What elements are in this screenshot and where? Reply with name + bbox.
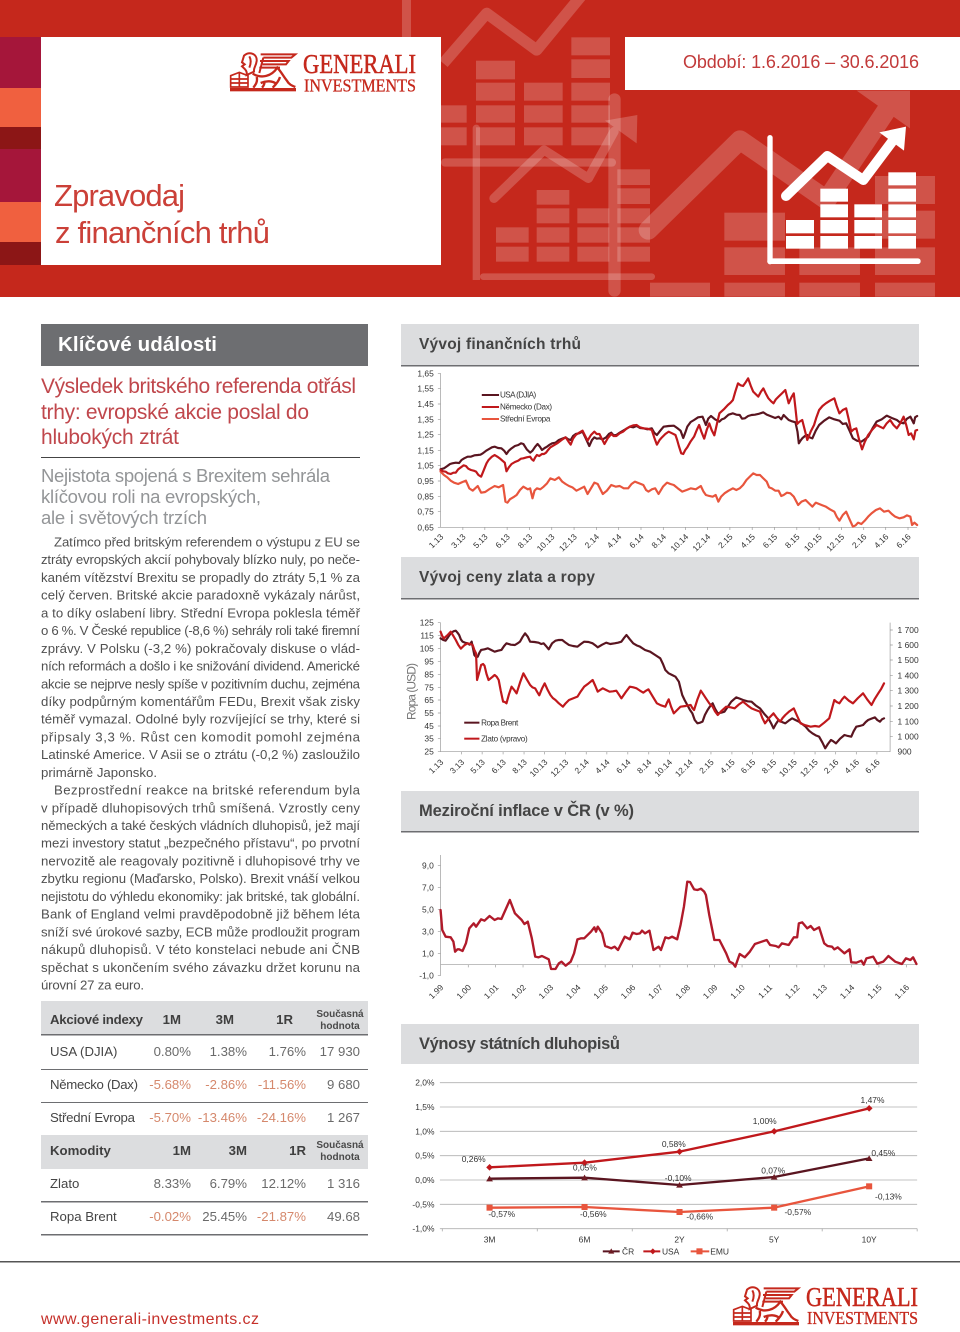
table: equity indices and commodities: 8.33%	[154, 1176, 191, 1191]
line chart: gold and oil: 45	[424, 721, 434, 731]
body text: ních reformách a došlo i ke snižování dividend. Americké	[41, 658, 360, 674]
line chart: financial markets: 1,05	[417, 461, 434, 471]
line chart: gold and oil: 10.13	[527, 757, 550, 779]
line chart: inflation: 1,0	[422, 949, 434, 959]
line chart: inflation: 1.06	[619, 982, 638, 1001]
line chart: gold and oil: 8.13	[510, 757, 529, 776]
heading: gold and oil: Vývoj ceny zlata a ropy	[419, 569, 595, 586]
header banner	[0, 0, 960, 297]
period box	[625, 37, 960, 90]
line chart: gold and oil: 1 100	[898, 716, 919, 726]
body text: ztráty evropských akcií pohybovaly blízko nuly, po neče-	[41, 552, 360, 567]
table: equity indices and commodities: 0.80%	[154, 1044, 191, 1059]
legend: gold and oil	[464, 718, 528, 743]
body text: Bezprostřední reakce na britské referendum byla	[54, 783, 361, 798]
body text: sníží své úrokové sazby, ECB může prodloužit program	[41, 924, 360, 939]
table header: commodities: Současná	[316, 1140, 364, 1151]
line chart: financial markets: 8.13	[516, 531, 534, 550]
line chart: government bond yields: 1,0%	[415, 1126, 435, 1136]
line chart: gold and oil: 105	[420, 643, 434, 653]
data labels: 0,05%	[573, 1163, 597, 1173]
body text: mezi investory statut „bezpečného přístavu“, po prvotní	[41, 836, 360, 851]
line chart: inflation: 1.05	[591, 982, 610, 1001]
line chart: inflation: 1.07	[646, 982, 665, 1001]
line chart: gold and oil: 10.14	[652, 757, 674, 779]
table: equity indices and commodities: 1 267	[327, 1110, 360, 1125]
table: equity indices and commodities: 9 680	[327, 1077, 360, 1092]
line chart: government bond yields: -1,0%	[412, 1224, 435, 1234]
table: equity indices and commodities: Německo (Dax)	[50, 1077, 138, 1092]
data labels: -0,66%	[686, 1212, 714, 1222]
line chart: financial markets: 1,35	[417, 414, 434, 424]
series: ČR	[486, 1155, 873, 1188]
heading: financial markets: Vývoj finančních trhů	[419, 336, 581, 353]
body text: nejistotu do výhledu ekonomiky: jak britské, tak globální.	[41, 889, 360, 904]
data labels: 0,26%	[462, 1154, 486, 1164]
table: equity indices and commodities: 1 316	[327, 1176, 360, 1191]
line chart: financial markets: 4.14	[605, 531, 624, 550]
body text: zbytku regionu (Maďarsko, Polsko). Brexit vnáší velkou	[41, 871, 360, 886]
line chart: financial markets: 1,55	[417, 384, 434, 394]
line chart: gold and oil: 125	[420, 618, 434, 628]
line chart: financial markets: 2.16	[850, 531, 869, 550]
line chart: financial markets: 2.15	[716, 531, 735, 550]
line chart: financial markets: 12.15	[824, 531, 846, 553]
legend: gold and oil: Ropa Brent	[481, 718, 519, 727]
body text: nákupů dluhopisů. V této konstelaci nebude ani ČNB	[41, 942, 360, 957]
legend: financial markets: Střední Evropa	[500, 415, 551, 424]
data labels: -0,56%	[580, 1209, 607, 1219]
footer logo: INVESTMENTS	[807, 1308, 918, 1328]
line chart: gold and oil: 35	[424, 734, 434, 744]
line chart: government bond yields: 6M	[579, 1235, 590, 1245]
panel: key events heading: Klíčové události	[58, 333, 217, 356]
line chart: gold and oil: 6.16	[863, 757, 882, 776]
line chart: inflation: 1.00	[454, 982, 473, 1001]
table header: equity indices	[50, 1009, 364, 1032]
line chart: inflation: 1.15	[865, 982, 884, 1001]
table: equity indices and commodities: -0.02%	[149, 1209, 191, 1224]
line chart: inflation: 1.10	[728, 982, 747, 1001]
line chart: inflation: 1.02	[509, 982, 528, 1001]
table header: commodities: Komodity	[50, 1143, 111, 1158]
line chart: financial markets: 8.14	[649, 531, 668, 550]
table: equity indices and commodities: 12.12%	[261, 1176, 306, 1191]
line chart: financial markets: 4.15	[738, 531, 757, 550]
table header: equity indices: hodnota	[320, 1021, 360, 1032]
footer logo: GENERALI	[806, 1282, 918, 1312]
line chart: inflation: 1.04	[564, 982, 583, 1001]
line chart: financial markets: 6.13	[493, 531, 512, 550]
table header: equity indices: Současná	[316, 1009, 364, 1020]
line chart: financial markets: 1,65	[417, 368, 434, 378]
line chart: gold and oil: 2.14	[572, 757, 591, 776]
legend: bonds: EMU	[710, 1246, 729, 1256]
legend: bonds: ČR	[622, 1246, 634, 1256]
line chart: inflation	[419, 855, 917, 1001]
data labels: 1,00%	[753, 1116, 777, 1126]
body text: připsaly 3,3 %. Růst cen komodit pomohl zejména	[41, 729, 361, 744]
body text: Bank of England velmi pravděpodobně již během léta	[41, 907, 361, 922]
logo: Generali Investments: INVESTMENTS	[304, 76, 416, 96]
body text: díky podpůrným komentářům FEDu, Brexit však zisky	[41, 694, 360, 709]
body text: Latinské Americe. V Asii se o ztrátu (-0,2 %) zasloužilo	[41, 747, 360, 762]
line chart: gold and oil: 55	[424, 708, 434, 718]
table: equity indices and commodities: -24.16%	[257, 1110, 306, 1125]
line chart: gold and oil: 6.15	[739, 757, 758, 776]
legend: gold and oil: Zlato (vpravo)	[481, 734, 528, 743]
data labels: -0,57%	[488, 1209, 516, 1219]
footer website: www.generali-investments.cz	[40, 1311, 259, 1328]
table: equity indices and commodities: -5.68%	[149, 1077, 191, 1092]
line chart: financial markets: 4.16	[872, 531, 891, 550]
data labels: -0,13%	[875, 1191, 902, 1201]
line chart: financial markets: 6.14	[627, 531, 646, 550]
line chart: gold and oil: 1 200	[898, 701, 919, 711]
line chart: gold and oil: 1.13	[427, 757, 446, 776]
title	[54, 178, 270, 250]
body text: akcie se nejprve nesly spíše v pozitivním duchu, zejména	[41, 676, 361, 691]
logo: Generali Investments	[230, 49, 416, 96]
data labels: 0,07%	[761, 1166, 786, 1176]
line chart: financial markets: 12.14	[690, 531, 713, 553]
table header: equity indices: Akciové indexy	[50, 1012, 144, 1027]
body text: a to díky oslabení libry. Střední Evropa poklesla téměř	[41, 605, 361, 620]
line chart: gold and oil: 6.13	[489, 757, 508, 776]
line chart: inflation: 5,0	[422, 904, 434, 914]
left colour stripes	[0, 37, 41, 265]
line chart: financial markets: 5.13	[471, 531, 490, 550]
legend: financial markets: USA (DJIA)	[500, 391, 537, 400]
line chart: gold and oil	[404, 618, 919, 779]
line chart: inflation: 1.03	[536, 982, 555, 1001]
grey subheading: Nejistota spojená s Brexitem sehrála	[41, 465, 331, 486]
line chart: inflation: 1.08	[673, 982, 692, 1001]
body text: zprávy. V Polsku (-3,2 %) pokračovaly diskuse o vlád-	[41, 641, 360, 656]
panel: key events heading	[41, 324, 368, 366]
line chart: gold and oil: 5.13	[468, 757, 487, 776]
line chart: government bond yields: 3M	[484, 1235, 495, 1245]
series: EMU	[487, 1183, 872, 1215]
data labels	[462, 1095, 902, 1222]
table: equity indices and commodities: 6.79%	[210, 1176, 247, 1191]
red headline: hlubokých ztrát	[41, 426, 179, 449]
line chart: government bond yields: 5Y	[769, 1235, 780, 1245]
line chart: financial markets: 0,85	[417, 491, 434, 501]
legend: bonds: USA	[662, 1246, 680, 1256]
line chart: financial markets: 0,75	[417, 507, 434, 517]
line chart: gold and oil: 4.16	[842, 757, 861, 776]
line chart: gold and oil: 12.15	[798, 757, 820, 779]
line chart: government bond yields: 2Y	[674, 1235, 685, 1245]
footer logo	[733, 1282, 918, 1328]
line chart: inflation: 1.12	[783, 982, 802, 1001]
body text: spěchat s ukončením svého závazku držet korunu na	[41, 960, 361, 975]
line chart: gold and oil: 75	[424, 682, 434, 692]
line chart: inflation: 1.01	[482, 982, 501, 1001]
heading: government bond yields	[401, 1024, 919, 1064]
title: Zpravodaj	[54, 178, 185, 213]
body text: téměř vymazal. Odolné byly rozvíjející se trhy, které si	[41, 712, 360, 727]
line chart: gold and oil: 115	[420, 631, 434, 641]
table: equity indices and commodities: -13.46%	[198, 1110, 247, 1125]
body text: Zatímco před britským referendem o výstupu z EU se	[54, 534, 360, 550]
line chart: inflation: 1.09	[701, 982, 720, 1001]
heading: inflation	[401, 791, 919, 832]
table header: commodities	[50, 1140, 364, 1163]
data labels: 1,47%	[861, 1095, 885, 1105]
line chart: government bond yields: 10Y	[862, 1235, 877, 1245]
line chart: gold and oil: 8.15	[760, 757, 779, 776]
legend: financial markets	[482, 391, 552, 424]
heading: gold and oil	[401, 557, 919, 600]
table header: commodities: 1R	[289, 1143, 306, 1158]
line chart: financial markets	[417, 368, 917, 553]
line chart: financial markets: 0,95	[417, 476, 434, 486]
line chart: inflation: 3,0	[422, 927, 434, 937]
line chart: financial markets: 0,65	[417, 522, 434, 532]
axis title: oil in USD: Ropa (USD)	[404, 663, 419, 720]
line chart: financial markets: 2.14	[582, 531, 601, 550]
line chart: financial markets: 10.15	[802, 531, 824, 553]
line chart: inflation: -1,0	[419, 971, 434, 981]
line chart: financial markets: 1,25	[417, 430, 434, 440]
period box: Období: 1.6.2016 – 30.6.2016	[683, 52, 919, 72]
data labels: 0,45%	[871, 1148, 896, 1158]
line chart: gold and oil: 1 300	[898, 686, 919, 696]
line chart: government bond yields: 2,0%	[415, 1078, 435, 1088]
table: equity indices and commodities: USA (DJIA)	[50, 1044, 117, 1059]
table header: equity indices: 1M	[163, 1012, 181, 1027]
body text: celý červen. Britské akcie paradoxně vykázaly nárůst,	[41, 588, 360, 603]
grey subheading	[41, 465, 331, 528]
legend: financial markets: Německo (Dax)	[500, 403, 552, 412]
line chart: inflation: 1.16	[892, 982, 911, 1001]
line chart: financial markets: 6.15	[761, 531, 780, 550]
table: equity indices and commodities: 1.76%	[269, 1044, 306, 1059]
line chart: government bond yields: 1,5%	[415, 1102, 435, 1112]
line chart: gold and oil: 1 500	[898, 655, 919, 665]
heading: government bond yields: Výnosy státních dluhopisů	[419, 1035, 620, 1053]
data labels: -0,57%	[784, 1207, 812, 1217]
body text	[41, 534, 361, 992]
body text: v případě dluhopisových trhů smíšená. Vzrostly ceny	[41, 800, 360, 815]
line chart: gold and oil: 4.15	[718, 757, 737, 776]
line chart: gold and oil: 2.16	[822, 757, 841, 776]
line chart: financial markets: 1.13	[427, 531, 446, 550]
line chart: inflation: 1.13	[810, 982, 829, 1001]
heading: inflation: Meziroční inflace v ČR (v %)	[419, 801, 634, 820]
red headline: trhy: evropské akcie poslal do	[41, 401, 309, 424]
legend: bonds	[603, 1246, 729, 1256]
line chart: gold and oil: 65	[424, 695, 434, 705]
body text: kaném vítězství Brexitu se propadly do ztráty 5,1 % za	[41, 570, 361, 585]
table header: equity indices: 1R	[276, 1012, 293, 1027]
line chart: gold and oil: 95	[424, 656, 434, 666]
line chart: gold and oil: 3.13	[448, 757, 467, 776]
body text: nervozitě ale reagovaly pozitivně i dluhopisové trhy ve	[41, 854, 360, 868]
line chart: financial markets: 12.13	[557, 531, 579, 553]
red headline	[41, 375, 356, 449]
body text: německých a také českých vládních dluhopisů, jež mají	[41, 818, 360, 833]
data labels: -0,10%	[665, 1173, 692, 1183]
line chart: gold and oil: 12.14	[673, 757, 695, 779]
line chart: gold and oil: 4.14	[593, 757, 612, 776]
line chart: gold and oil: 85	[424, 669, 434, 679]
line chart: financial markets: 1,15	[417, 445, 434, 455]
line chart: financial markets: 6.16	[894, 531, 913, 550]
line chart: gold and oil: 900	[898, 747, 912, 757]
body text: úrovní 27 za euro.	[41, 978, 144, 992]
table: equity indices and commodities: Ropa Brent	[50, 1209, 117, 1224]
icon: white chart with arrow	[767, 127, 921, 264]
line chart: government bond yields	[412, 1078, 917, 1256]
line chart: gold and oil: 25	[424, 747, 434, 757]
line chart: gold and oil: 1 700	[898, 625, 919, 635]
logo: Generali Investments: GENERALI	[303, 49, 416, 79]
table: equity indices and commodities: 25.45%	[202, 1209, 247, 1224]
title: z finančních trhů	[55, 215, 270, 250]
table header: commodities: hodnota	[320, 1152, 360, 1163]
line chart: gold and oil: 2.15	[697, 757, 716, 776]
table: equity indices and commodities: 1.38%	[210, 1044, 247, 1059]
red headline: Výsledek britského referenda otřásl	[41, 375, 356, 398]
line chart: financial markets: 10.13	[535, 531, 557, 553]
line chart: inflation: 7,0	[422, 883, 434, 893]
table header: commodities: 3M	[229, 1143, 247, 1158]
table: equity indices and commodities: -11.56%	[258, 1077, 306, 1092]
line chart: financial markets: 3.13	[449, 531, 468, 550]
table: equity indices and commodities: 17 930	[320, 1044, 360, 1059]
line chart: gold and oil: 10.15	[777, 757, 799, 779]
table: equity indices and commodities: -21.87%	[257, 1209, 306, 1224]
series: USA	[486, 1105, 873, 1171]
line chart: gold and oil: 6.14	[614, 757, 633, 776]
line chart: financial markets: 1,45	[417, 399, 434, 409]
heading: financial markets	[401, 324, 919, 366]
grey subheading: ale i světových trzích	[41, 507, 207, 528]
table header: commodities: 1M	[173, 1143, 191, 1158]
line chart: gold and oil: 12.13	[548, 757, 571, 779]
line chart: inflation: 1.99	[427, 982, 446, 1001]
line chart: inflation: 9,0	[422, 861, 434, 871]
table: equity indices and commodities	[41, 1001, 368, 1236]
table: equity indices and commodities: Střední Evropa	[50, 1110, 136, 1125]
table: equity indices and commodities: 49.68	[327, 1209, 360, 1224]
body text: o 6 %. V České republice (-8,6 %) sehrály roli také firemní	[41, 623, 360, 638]
table header: equity indices: 3M	[216, 1012, 234, 1027]
table: equity indices and commodities: -5.70%	[149, 1110, 191, 1125]
table: equity indices and commodities: -2.86%	[205, 1077, 247, 1092]
line chart: gold and oil: 1 000	[898, 732, 919, 742]
line chart: government bond yields: -0,5%	[412, 1199, 435, 1209]
line chart: gold and oil: 8.14	[635, 757, 654, 776]
white title panel	[41, 37, 441, 265]
line chart: inflation: 1.11	[756, 982, 774, 1000]
line chart: inflation: 1.14	[838, 982, 857, 1001]
line chart: government bond yields: 0,0%	[415, 1175, 435, 1185]
line chart: gold and oil: 1 600	[898, 640, 919, 650]
grey subheading: klíčovou roli na evropských,	[41, 486, 261, 507]
line chart: financial markets: 8.15	[783, 531, 802, 550]
line chart: financial markets: 10.14	[668, 531, 691, 553]
data labels: 0,58%	[662, 1139, 686, 1149]
table: equity indices and commodities: Zlato	[50, 1176, 79, 1191]
line chart: gold and oil: 1 400	[898, 670, 919, 680]
body text: primárně Japonsko.	[41, 765, 157, 780]
line chart: government bond yields: 0,5%	[415, 1151, 435, 1161]
